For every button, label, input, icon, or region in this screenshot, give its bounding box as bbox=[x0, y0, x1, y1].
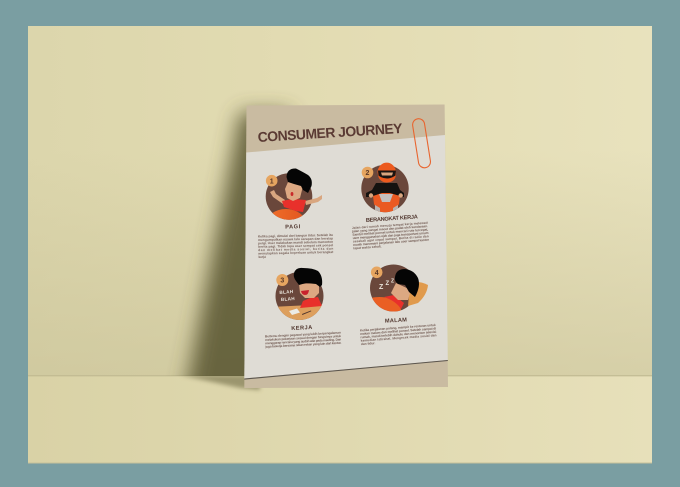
step 3 heading: KERJA bbox=[291, 325, 313, 332]
helmet bbox=[378, 163, 396, 182]
step 4 body text bbox=[360, 323, 437, 346]
poster light body bbox=[244, 135, 448, 378]
number badge 1: 1 bbox=[270, 178, 274, 185]
step 2 body text: jalan yang sangat macet dan padat oleh kendaraan. bbox=[351, 224, 428, 233]
number badge 4 bbox=[371, 266, 383, 278]
poster bottom edge bbox=[244, 360, 448, 380]
sleeping z letters bbox=[379, 278, 394, 291]
blah blah speech: BLAH bbox=[281, 296, 295, 302]
step 2 body text: tepat waktu sekali. bbox=[353, 244, 382, 250]
number badge 2 bbox=[362, 167, 373, 178]
left arm bbox=[270, 190, 285, 204]
face bbox=[391, 283, 411, 300]
step 2 body text: sesekali agar cepat sampai. Berita di radio dan bbox=[353, 234, 429, 244]
shirt bbox=[282, 199, 306, 212]
step 3: kerja illustration bbox=[276, 268, 324, 320]
mouth bbox=[301, 290, 309, 295]
step 2 body text: user menggunakan ojek dan juga transportasi umum bbox=[353, 231, 429, 240]
face bbox=[299, 283, 319, 298]
face bbox=[381, 172, 393, 176]
step 1 heading: PAGI bbox=[285, 224, 301, 231]
step 4 body text: makan malam dan melihat ponsel. Setelah sampai di bbox=[360, 326, 436, 336]
step 1 body text: Ketika pagi, dimulai dari bangun tidur. Setelah itu bbox=[258, 233, 333, 238]
step 1 body text: mengumpulkan nyawa lalu sarapan dan bersiap bbox=[258, 236, 333, 242]
paper shadow on wall bbox=[176, 112, 290, 440]
step 4 body text: kemudian istirahat. Mengecek media sosial dan bbox=[361, 333, 437, 343]
right arm bbox=[305, 195, 322, 205]
shirt bbox=[300, 297, 322, 308]
visor bbox=[378, 170, 396, 178]
step 4 body text: dan tidur. bbox=[361, 341, 376, 346]
sleeping z letters: Z bbox=[379, 284, 384, 291]
blah blah speech bbox=[279, 289, 295, 302]
face bbox=[285, 182, 303, 201]
step 3 body text: Bertemu dengan pegawai yang lebih berpengalaman bbox=[265, 331, 341, 338]
hands bbox=[369, 193, 373, 198]
icon: paperclip bbox=[412, 118, 431, 169]
step 4 body text: rumah, mandi terlebih dahulu dan menonton televisi bbox=[360, 330, 437, 339]
step 1 body text: kerja bbox=[258, 255, 266, 259]
hair bbox=[286, 168, 312, 193]
number badge 1 bbox=[266, 175, 278, 186]
step 1 body text: pergi. User melakukan mandi sebelum menonton bbox=[258, 240, 333, 245]
scooter bbox=[373, 193, 400, 213]
step 2 body text: Jalan dari rumah menuju tempat kerja melewati bbox=[352, 221, 428, 230]
paper shadow on floor bbox=[180, 375, 260, 390]
title: CONSUMER JOURNEY bbox=[257, 120, 404, 145]
blah blah speech: BLAH bbox=[279, 289, 294, 295]
step 3 body text bbox=[264, 331, 342, 349]
step 2: berangkat kerja illustration bbox=[361, 163, 409, 213]
step 3 body text: juga bekerja bersama rekan-rekan yang lain dari kantor. bbox=[264, 341, 342, 349]
step 3 body text: melakukan pekerjaan sesuai dengan fungsinya untuk bbox=[265, 334, 341, 342]
step 2 body text: Sambil melihat ponsel untuk mencari rute tercepat, bbox=[352, 227, 428, 237]
step 2 body text: musik menemani perjalanan lalu user sampai kantor bbox=[353, 238, 430, 247]
rider torso bbox=[366, 183, 404, 197]
step 1 body text: berita pagi. Tidak lupa user sempat cek ponsel bbox=[258, 243, 333, 249]
number badge 2: 2 bbox=[366, 170, 370, 177]
hair bbox=[294, 268, 322, 287]
step 1: pagi illustration bbox=[266, 168, 322, 220]
step 4 heading: MALAM bbox=[385, 317, 407, 325]
desk bbox=[278, 304, 322, 320]
hair bbox=[395, 269, 419, 297]
blanket bbox=[372, 297, 402, 312]
sheet on desk bbox=[289, 308, 300, 315]
sleeping z letters: Z bbox=[391, 278, 394, 284]
step 1 body text: menyiapkan segala keperluan untuk berangkat bbox=[258, 250, 334, 256]
sleeping z letters: Z bbox=[386, 281, 390, 287]
step 2 body text bbox=[351, 221, 430, 250]
number badge 3: 3 bbox=[280, 278, 284, 285]
step 1 body text: dan melihat media sosial, berita dan bbox=[258, 247, 333, 252]
step 4 body text: Ketika perjalanan pulang, mampir ke restoran untuk bbox=[360, 323, 436, 332]
mouth bbox=[291, 192, 293, 196]
step 4: malam illustration bbox=[370, 264, 428, 316]
step 2 heading: BERANGKAT KERJA bbox=[366, 214, 418, 224]
pillow bbox=[408, 282, 428, 306]
pen bbox=[302, 310, 311, 315]
number badge 3 bbox=[276, 274, 288, 286]
poster sheet bbox=[244, 104, 448, 388]
step 1 body text bbox=[258, 233, 334, 259]
number badge 4: 4 bbox=[375, 270, 379, 277]
step 3 body text: menggarap rencana yang sudah ada pada meeting. Dan bbox=[265, 337, 341, 345]
